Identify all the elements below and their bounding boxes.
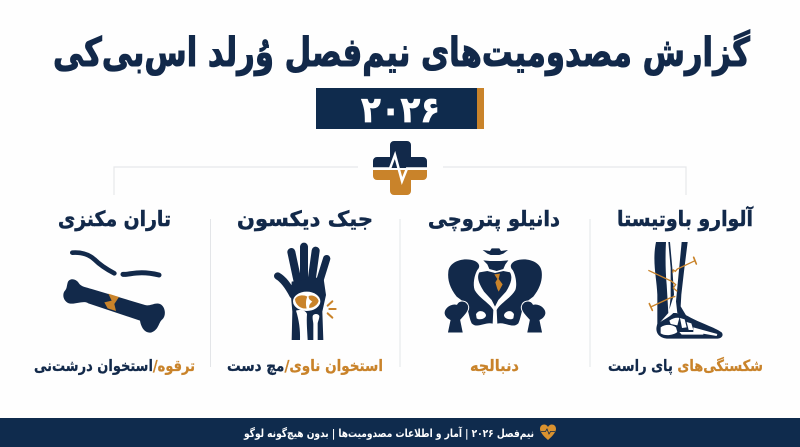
footer text: نیم‌فصل ۲۰۲۶ | آمار و اطلاعات مصدومیت‌ها | بدون هیچ‌گونه لوگو xyxy=(243,426,534,440)
icon: right leg and foot with screws xyxy=(648,242,723,339)
icon: heart with pulse xyxy=(540,425,556,440)
label: collarbone / tibia: ترقوه/استخوان درشت‌نی xyxy=(34,357,195,375)
label: coccyx: دنبالچه xyxy=(470,357,519,376)
icon: pelvis with fractured coccyx xyxy=(444,248,546,333)
label: right leg fractures: شکستگی‌های پای راست xyxy=(608,356,763,376)
heading: Alvaro Bautista: آلوارو باوتیستا xyxy=(617,206,754,231)
heading: Taran McKenzie: تاران مکنزی xyxy=(58,207,171,231)
icon: medical cross with pulse xyxy=(373,141,427,195)
heading: Jack Dixon: جیک دیکسون xyxy=(237,207,373,231)
icon: hand and wrist x-ray xyxy=(278,247,336,340)
label: scaphoid / wrist: استخوان ناوی/مچ دست xyxy=(227,357,383,375)
heading: Danilo Petrucci: دانیلو پتروچی xyxy=(428,207,560,231)
year badge xyxy=(316,88,484,131)
footer bar xyxy=(0,418,800,447)
year badge: ۲۰۲۶ xyxy=(361,90,440,131)
icon: broken collarbone and tibia xyxy=(63,253,165,333)
